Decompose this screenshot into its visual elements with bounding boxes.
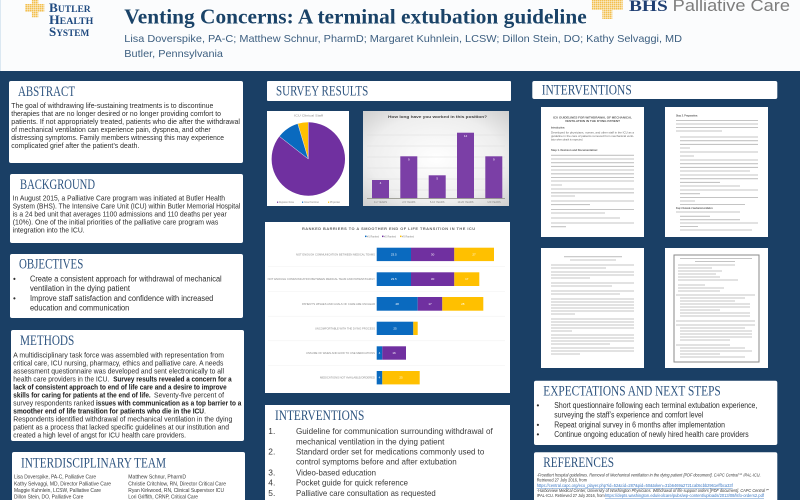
chart: ranked barriers stacked bars (265, 222, 510, 393)
bar row 5: 16 (392, 351, 396, 355)
chart: ICU clinical staff pie: Physician (330, 200, 340, 204)
bar row 3 (302, 297, 483, 311)
text: methods body: created a high level of angst for ICU health care providers. (13, 431, 186, 440)
list: objectives: education and communication (30, 304, 129, 312)
document: ICU guidelines page 1: ICU GUIDELINES FOR WITHDRAWAL OF MECHANICAL (553, 116, 632, 120)
text: background body (13, 194, 241, 235)
text: abstract body: of mechanical ventilation can experience pain, dyspnea, and other (11, 125, 211, 134)
text: methods body: patient as a process that lacked specific guidelines at our institution and (13, 423, 229, 432)
bar row 2: 17 (465, 277, 469, 281)
text: methods body: . (204, 407, 206, 416)
bar row 2: 30 (431, 277, 435, 281)
document: order set form (665, 248, 768, 368)
list: team left column: Kathy Selvaggi, MD, Director Palliative Care (14, 481, 111, 487)
bar row 3: 28 (461, 302, 465, 306)
header band (0, 0, 800, 71)
chart: years in position bar chart: 2-5 YEARS (402, 200, 416, 204)
list: next steps: Continue ongoing education of newly hired health care providers (554, 430, 749, 439)
text: background body: System (BHS). The Intensive Care Unit (ICU) within Butler Memorial Hospital (13, 202, 241, 211)
document: ICU guidelines page 1: VENTILATION IN THE DYING PATIENT (565, 119, 620, 123)
list: next steps: Repeat original survey in 6 months after implementation (554, 420, 725, 429)
chart: years in position bar chart: How long have you worked in this position? (388, 115, 487, 119)
logo: Butler Health System: System (49, 25, 90, 39)
list: numbered interventions: 5. (268, 488, 275, 498)
title: Venting Concerns: A terminal extubation guideline (124, 4, 587, 28)
text: methods body: critical care, ICU nursing, pharmacy, ethics and palliative care. A needs (13, 359, 224, 368)
panel: survey results heading (267, 81, 511, 101)
bar row 3: PATIENT'S WISHES AND GOALS OF CARE ARE UNCLEAR (302, 302, 375, 306)
document: ICU guidelines page 1: Step 1. Decision and Documentation: (551, 148, 598, 152)
panel: interdisciplinary team (12, 452, 245, 500)
document: ICU guidelines page 2: Step 2. Preparation: (676, 114, 698, 118)
text: reference list: https://depts.washington.edu/eolcare/pubs/wp-content/uploads/2013/08/lsfo-orders2.pdf (605, 493, 765, 498)
list: numbered interventions: Pocket guide for quick reference (296, 478, 408, 488)
text: abstract body: complicated grief after the patient’s death. (11, 141, 139, 150)
document: principles of withdrawal page (541, 248, 644, 368)
chart: years in position bar chart: 14 (464, 134, 467, 138)
document: ICU guidelines page 1 (541, 107, 644, 237)
chart: ICU clinical staff pie: Registered Nurse (279, 200, 294, 204)
bar row 1: NOT ENOUGH COMMUNICATION BETWEEN MEDICAL TEAMS (296, 252, 375, 256)
authors: Lisa Doverspike, PA-C; Matthew Schnur, PharmD; Margaret Kuhnlein, LCSW; Dillon Stein, DO; Kathy Selvaggi, MD (124, 33, 682, 45)
list: objectives: ventilation in the dying patient (30, 284, 131, 293)
text: abstract body: therapies that are no longer desired or no longer providing comfort to (11, 109, 221, 118)
chart: years in position bar chart: >20 YEARS (487, 200, 501, 204)
legend: #2 Ranked (384, 234, 397, 238)
document: ICU guidelines page 1: lator when death is expected. (551, 138, 583, 142)
chart: ICU clinical staff pie (267, 111, 349, 206)
text: reference list: -Harborview Medical Center, University of Washington Physicians. Withdrawal of life support orders [PDF document]. CAPC Central℠ (537, 488, 769, 493)
text: reference list: -Froedtert hospital guidelines. Removal of Mechanical ventilation in the dying patient [PDF document]. CAPC Central℠ IPAL-ICU. (537, 472, 761, 478)
list: team right column: Matthew Schnur, PharmD (128, 475, 186, 481)
bar row 4 (315, 322, 418, 335)
legend: #1 Ranked (367, 234, 380, 238)
panel: references (534, 452, 777, 500)
text: methods body: issues with communication as a top barrier to a (96, 399, 242, 408)
text: reference list: Retrieved 27 July 2016, from (537, 478, 588, 483)
legend: #3 Ranked (402, 234, 415, 238)
panel: survey results heading: SURVEY RESULTS (276, 83, 368, 99)
text: abstract body: patients. If not appropriately treated, patients who die after the withdrawal (11, 117, 240, 126)
chart: years in position bar chart: 9 (408, 158, 410, 162)
bar row 2: 23.5 (391, 277, 397, 281)
list: numbered interventions: control symptoms before and after extubation (296, 457, 457, 467)
chart: ICU clinical staff pie: ICU Clinical Staff (294, 113, 323, 117)
chart: years in position bar chart: 4 (380, 181, 382, 185)
text: methods body: health care providers in the ICU. (13, 375, 109, 384)
logo: Butler Health System: Butler (49, 1, 91, 15)
text: methods body: A multidisciplinary task force was assembled with representation from (13, 351, 224, 360)
list: numbered interventions (268, 426, 493, 498)
bar row 3: 17 (428, 302, 432, 306)
text: background body: In August 2015, a Palliative Care program was initiated at Butler Health (13, 194, 225, 203)
text: reference list: https://central.capc.org/eco_player.php?id=52&cid=287&pid=50&token=31b6469a2721cab5cbb2961effbca33f (537, 483, 734, 488)
bar row 6: MEDICATIONS NOT AVAILABLE/ORDERED (320, 376, 375, 380)
bar row 1: 23.5 (391, 252, 397, 256)
heading: objectives: OBJECTIVES (19, 257, 83, 273)
text: methods body: survey respondents ranked (13, 399, 94, 408)
text: background body: (10%). One of the initial priorities of the palliative care program was (13, 218, 219, 227)
authors: Butler, Pennsylvania (124, 48, 223, 60)
list: objectives: • (13, 294, 16, 303)
text: background body: integration into the ICU. (13, 226, 85, 235)
chart: years in position bar chart: 0-2 YEARS (374, 200, 387, 204)
document: ICU guidelines page 2 (665, 107, 768, 237)
panel: interventions heading: INTERVENTIONS (542, 83, 632, 99)
panel: methods (11, 330, 244, 441)
panel: expectations and next steps (534, 381, 777, 445)
list: next steps: • (536, 430, 540, 439)
document: ICU guidelines page 1: Developed for physicians, nurses, and other staff in the ICU as a (551, 130, 634, 134)
list: next steps: • (536, 401, 540, 410)
text: reference list: IPAL-ICU. Retrieved 27 July 2016, from (537, 493, 605, 498)
bar row 6 (320, 371, 420, 384)
bar row 5 (306, 346, 406, 360)
heading: interventions list: INTERVENTIONS (275, 408, 364, 424)
list: numbered interventions: 3. (268, 467, 275, 477)
text: methods body: Seventy-five percent of (154, 391, 225, 400)
document: ICU guidelines page 2: Step 3. Removal of mechanical ventilation: (676, 206, 713, 210)
list: team right column (128, 475, 226, 500)
chart: years in position bar chart (363, 111, 509, 206)
panel: interventions heading (532, 81, 777, 99)
document: ICU guidelines page 1: guideline in the care of patients removed from mechanical venti- (551, 134, 634, 138)
bar row 6: 25 (399, 376, 403, 380)
logo: Butler Health System: Health (49, 13, 93, 27)
heading: references: REFERENCES (543, 455, 614, 471)
list: numbered interventions: Guideline for communication surrounding withdrawal of (296, 426, 493, 436)
list: numbered interventions: mechanical ventilation in the dying patient (296, 436, 445, 446)
text: methods body (13, 351, 242, 440)
logo: Butler Health System (25, 0, 93, 39)
text: methods body: smoother end of life transition for patients who die in the ICU (13, 407, 204, 416)
list: team right column: Christie Critchlow, RN, Director Critical Care (128, 481, 226, 487)
text: methods body: Survey results revealed a concern for a (113, 375, 233, 384)
heading: abstract: ABSTRACT (18, 84, 75, 100)
text: methods body: Respondents identified withdrawal of mechanical ventilation in the dying (13, 415, 232, 424)
text: methods body: skills for caring for patients at the end of life. (13, 391, 151, 400)
bar row 2: NOT ENOUGH COMMUNICATION BETWEEN MEDICAL TEAM AND PATIENT/FAMILY (268, 277, 375, 281)
authors (124, 33, 682, 60)
list: numbered interventions: 1. (268, 426, 275, 436)
list: objectives: • (13, 274, 16, 284)
list: objectives: Create a consistent approach for withdrawal of mechanical (30, 274, 222, 284)
list: objectives: Improve staff satisfaction and confidence with increased (30, 294, 213, 303)
list: numbered interventions: Video-based education (296, 467, 376, 477)
bar row 5: 4 (379, 351, 381, 355)
list: next steps: surveying the staff’s experience and comfort level (554, 411, 703, 420)
text: reference list (537, 472, 769, 498)
chart: years in position bar chart: 5 (436, 176, 438, 180)
heading: methods: METHODS (20, 333, 74, 349)
bar row 1: 30 (431, 252, 435, 256)
list: numbered interventions: 2. (268, 447, 275, 457)
list: objectives (13, 274, 222, 312)
chart: ICU clinical staff pie: Nurse Practitioner (304, 200, 319, 204)
list: numbered interventions: Standard order set for medications commonly used to (296, 447, 485, 457)
list: team left column: Lisa Doverspike, PA-C, Palliative Care (14, 475, 96, 481)
heading: expectations: EXPECTATIONS AND NEXT STEPS (543, 384, 721, 400)
list: next steps (536, 401, 757, 439)
bar row 6: 4 (379, 376, 381, 380)
chart: years in position bar chart: 9 (493, 158, 495, 162)
bar row 1: 27 (472, 252, 476, 256)
text: methods body: lack of consistent approach to end of life care and a desire to improve (13, 383, 227, 392)
bar row 1 (296, 248, 494, 261)
text: abstract body (11, 101, 240, 150)
chart: years in position bar chart: 10-20 YEARS (457, 200, 474, 204)
list: numbered interventions: 4. (268, 478, 275, 488)
logo: BHS Palliative Care (592, 0, 790, 19)
panel: background (10, 174, 243, 243)
list: team left column (14, 475, 111, 500)
list: team left column: Maggie Kuhnlein, LCSW, Palliative Care (14, 488, 101, 494)
bar row 3: 28 (396, 302, 399, 306)
text: methods body: assessment questionnaire was developed and sent electronically to all (13, 367, 224, 376)
list: team right column: Ryan Kirkwood, RN, Clinical Supervisor ICU (128, 488, 224, 494)
list: numbered interventions: Palliative care consultation as requested (296, 488, 436, 498)
text: background body: is a 24 bed unit that averages 1100 admissions and 110 deaths per year (13, 210, 227, 219)
bar row 4: 25 (393, 326, 397, 330)
chart: years in position bar chart: 5-10 YEARS (430, 200, 445, 204)
panel: abstract (9, 81, 243, 163)
chart: ranked barriers stacked bars: RANKED BARRIERS TO A SMOOTHER END OF LIFE TRANSITION IN THE ICU (302, 226, 475, 231)
heading: interdisciplinary team: INTERDISCIPLINARY TEAM (21, 455, 166, 471)
list: next steps: • (536, 420, 540, 429)
legend (365, 234, 415, 238)
text: abstract body: distressing symptoms. Family members witnessing this may experience (11, 133, 224, 142)
bar row 4: UNCOMFORTABLE WITH THE DYING PROCESS (315, 326, 375, 330)
text: abstract body: The goal of withdrawing life-sustaining treatments is to discontinue (11, 101, 213, 110)
bar row 5: UNSURE OF WHEN AND HOW TO USE MEDICATIONS (306, 351, 375, 355)
panel: objectives (10, 254, 243, 318)
list: next steps: Short questionnaire following each terminal extubation experience, (554, 401, 757, 410)
bar row 2 (268, 272, 479, 286)
heading: background: BACKGROUND (20, 177, 95, 193)
panel: interventions list (265, 405, 510, 500)
document: ICU guidelines page 1: Introduction: (551, 126, 565, 130)
